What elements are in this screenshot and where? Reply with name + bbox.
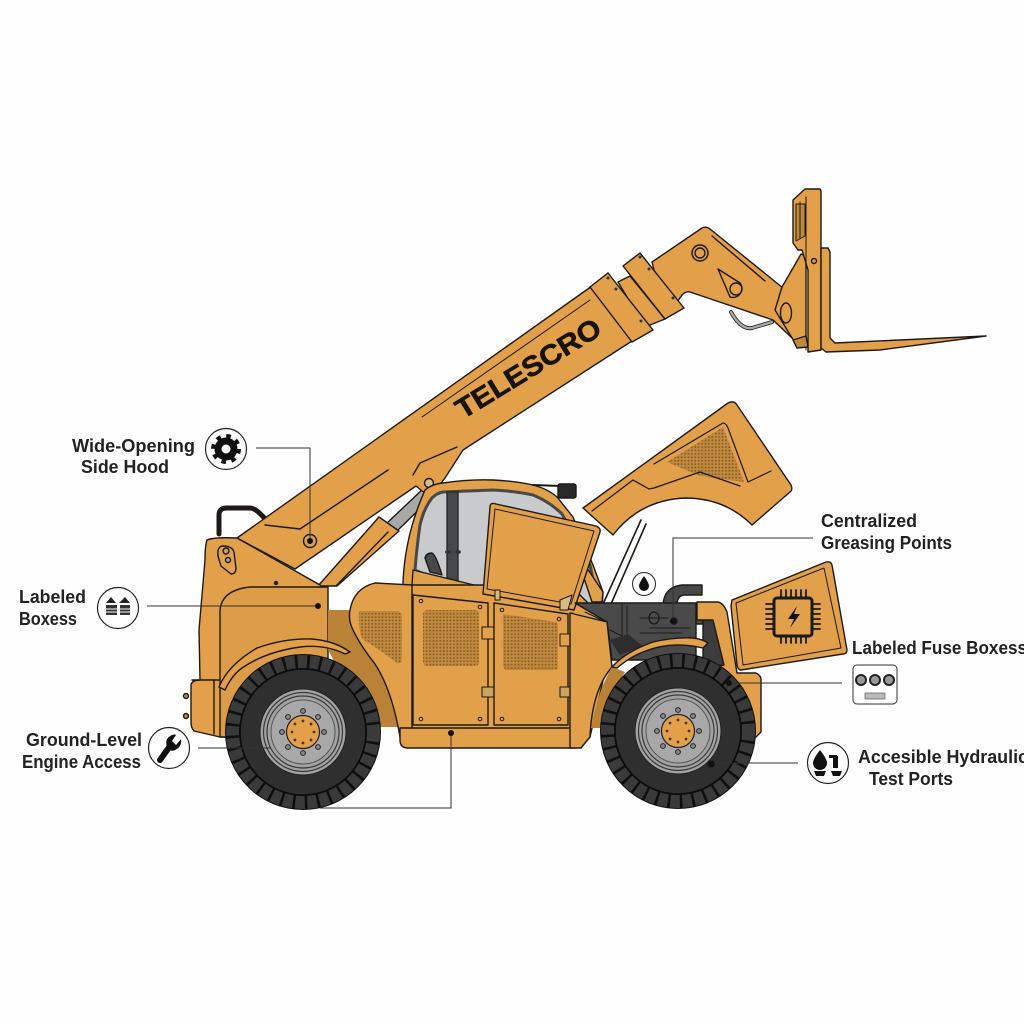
label: accessible hydraulic test ports: Test Ports (869, 769, 953, 789)
icon: wrench (148, 728, 190, 768)
rear arch shade (328, 610, 400, 727)
lift cylinder (318, 487, 434, 586)
icon: gear (206, 428, 246, 470)
cab (403, 480, 603, 612)
label: centralized greasing points: Greasing Points (821, 533, 952, 553)
side skirt (400, 728, 581, 748)
label: wide-opening side hood: Side Hood (81, 457, 169, 477)
rear wheel (225, 654, 381, 810)
label: ground-level engine access: Ground-Level (26, 730, 142, 750)
label: centralized greasing points (821, 511, 952, 553)
carriage and fork (775, 189, 986, 352)
rear fender (219, 639, 350, 690)
boom main section (237, 286, 632, 569)
label: accessible hydraulic test ports (858, 747, 1024, 789)
centre body (349, 583, 610, 737)
fuse box cover (731, 562, 847, 670)
label: labeled boxes: Labeled (19, 587, 86, 607)
icon: labeled boxes (98, 588, 138, 628)
right service door (494, 603, 570, 725)
front arch shade (591, 667, 625, 728)
icon: fuse box (853, 665, 897, 704)
telehandler machine illustration (184, 189, 986, 810)
front fender (612, 638, 708, 668)
boom collars and second stage (590, 227, 792, 342)
icon: chip with lightning bolt (766, 590, 820, 643)
left service door (413, 595, 494, 725)
rear side panel (220, 587, 328, 737)
boom brand text: TELESCRO (450, 312, 607, 425)
front wheel (600, 653, 756, 809)
label: ground-level engine access (22, 730, 142, 772)
open cab door panel (483, 503, 600, 610)
front frame (650, 602, 761, 737)
label: centralized greasing points: Centralized (821, 511, 917, 531)
callout anchor dots (307, 538, 732, 768)
label: labeled boxes: Boxess (19, 609, 77, 629)
callout leader lines (147, 448, 842, 808)
label: wide-opening side hood (72, 436, 195, 477)
label: ground-level engine access: Engine Access (22, 752, 141, 772)
icon: hydraulic ports (808, 742, 848, 784)
engine bay (575, 585, 725, 668)
label: labeled boxes (19, 587, 86, 629)
label: wide-opening side hood: Wide-Opening (72, 436, 195, 456)
rear tower and counterweight (184, 538, 330, 737)
icon: oil drop badge (632, 572, 656, 596)
label: accessible hydraulic test ports: Accesible Hydraulic (858, 747, 1024, 767)
grab handle (219, 508, 266, 534)
front body (570, 613, 612, 748)
hydraulic hose (731, 312, 772, 328)
raised side hood (583, 402, 792, 535)
hood struts (604, 520, 646, 604)
